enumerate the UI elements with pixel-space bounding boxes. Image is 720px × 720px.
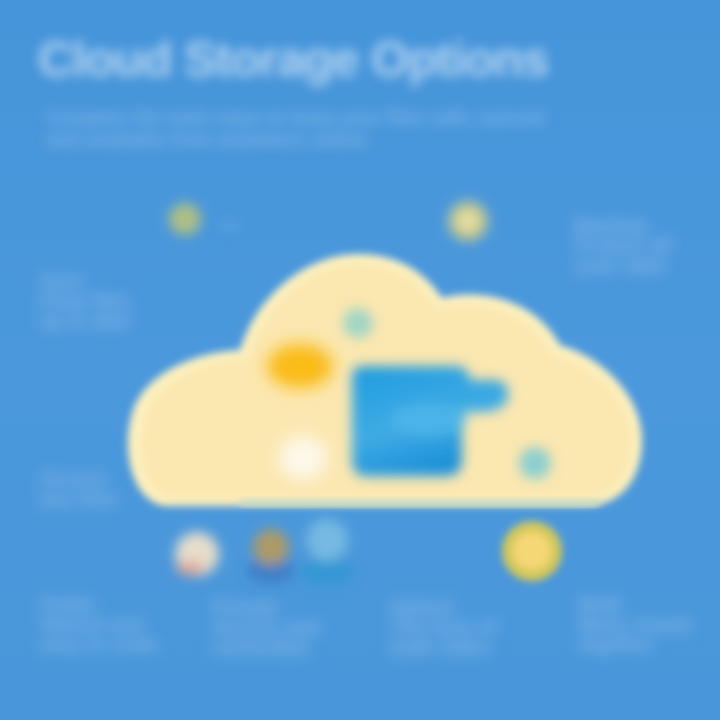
feature 2: controlled (212, 637, 309, 659)
feature 3 (388, 597, 498, 659)
subtitle: Compare the main ways to keep your files safe, synced and available from anywhere online (46, 108, 544, 151)
feature 3: The best of (390, 617, 497, 639)
feature 1: easy to scale (40, 635, 158, 656)
label top right (572, 214, 674, 277)
label mid left: any time (40, 489, 117, 510)
feature 1 (38, 594, 158, 656)
feature 4: Many clouds (578, 615, 693, 636)
label mid left (40, 469, 117, 510)
title: Cloud Storage Options (38, 33, 548, 87)
feature 1: Shared and (40, 615, 143, 636)
icon bottom 4 (502, 521, 562, 581)
label top right: Protect all (575, 235, 672, 257)
feature 4: Multi (578, 595, 622, 616)
feature 1: Public (40, 595, 97, 616)
yellow label on cloud (267, 344, 333, 388)
label top right: your data (575, 255, 665, 277)
cloud base shadow (240, 499, 600, 506)
teal dot top (343, 308, 373, 338)
white dot on cloud (279, 436, 327, 480)
icon top right (448, 201, 488, 241)
feature 2: Private (212, 597, 279, 619)
teal dot right (519, 447, 551, 479)
label mid left: Access (40, 469, 107, 490)
icon bottom 1 (175, 532, 219, 576)
feature 2 (210, 596, 322, 659)
icon bottom 2 (247, 529, 295, 583)
cloud (128, 254, 642, 506)
label top right: Backup (575, 215, 647, 237)
label top left: up to date (40, 311, 131, 332)
icon bottom 3 (299, 519, 355, 585)
feature 3: both sides (390, 637, 490, 659)
feature 3: Hybrid (390, 597, 453, 619)
feature 2: Secure and (212, 617, 320, 639)
label top left (38, 271, 131, 332)
feature 4: together (578, 635, 654, 656)
label top left: Keep files (40, 291, 130, 312)
label small top: Go (220, 217, 239, 233)
icon top left (169, 203, 201, 235)
blue document (352, 366, 508, 476)
feature 4 (576, 594, 693, 658)
label top left: Sync (40, 271, 85, 292)
